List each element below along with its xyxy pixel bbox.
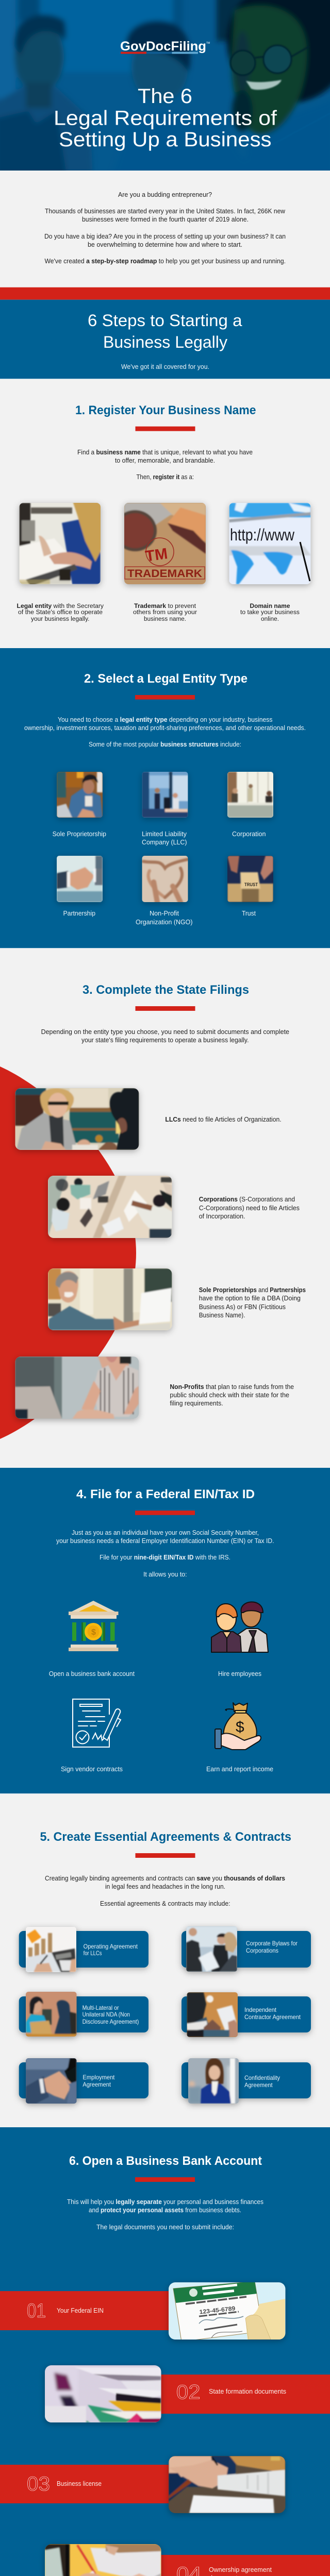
filing text blocks: public should check with their state for the bbox=[170, 1392, 289, 1399]
thumbnail: signing contract on wood table bbox=[186, 1992, 238, 2037]
banner heading: Business Legally bbox=[103, 333, 227, 351]
card label: Disclosure Agreement) bbox=[82, 2018, 139, 2025]
label: Sign vendor contracts bbox=[61, 1766, 123, 1773]
card: NDA bbox=[19, 1992, 148, 2037]
card label: Multi-Lateral or bbox=[82, 2004, 119, 2011]
row 03: business license: 03 bbox=[27, 2473, 50, 2495]
title bbox=[54, 85, 277, 151]
entity type labels: Sole Proprietorship bbox=[53, 831, 106, 838]
card label: Employment bbox=[82, 2074, 115, 2081]
photo: overhead desk with corporate team bbox=[48, 1176, 173, 1238]
card label bbox=[82, 2074, 115, 2088]
banner heading bbox=[88, 311, 242, 351]
captions: Trademark to prevent bbox=[134, 603, 196, 609]
card label: for LLCs bbox=[84, 1950, 102, 1957]
entity type labels: Non-Profit bbox=[150, 910, 179, 917]
section 6: open a business bank account bbox=[0, 2127, 330, 2576]
card: operating agreement bbox=[19, 1927, 148, 1972]
hero banner bbox=[0, 0, 330, 178]
heading 6: 6. Open a Business Bank Account bbox=[69, 2154, 262, 2168]
row 02: state formation documents: State formation documents bbox=[209, 2388, 286, 2395]
section 1 intro: Find a business name that is unique, relevant to what you have bbox=[77, 449, 253, 456]
section 3: complete the state filings bbox=[0, 983, 306, 1439]
filing text blocks: LLCs need to file Articles of Organization. bbox=[165, 1116, 282, 1123]
photo: corporation meeting in bright office bbox=[227, 772, 273, 818]
card label: Corporate Bylaws for bbox=[246, 1940, 298, 1947]
filing text blocks: Business As) or FBN (Fictitious bbox=[199, 1303, 286, 1311]
row 02: state formation documents: 02 bbox=[176, 2381, 201, 2403]
entity type labels: Partnership bbox=[63, 910, 95, 917]
thumbnail: businesswoman in blue blazer bbox=[188, 2058, 239, 2104]
icon: money bag in hand: $ bbox=[236, 1719, 244, 1736]
card label: Confidentiality bbox=[244, 2074, 280, 2081]
section 5 intro: Essential agreements & contracts may include: bbox=[100, 1900, 230, 1907]
filing text blocks: have the option to file a DBA (Doing bbox=[199, 1295, 301, 1302]
title: The 6 bbox=[138, 85, 192, 108]
filing text blocks: Sole Proprietorships and Partnerships bbox=[199, 1286, 306, 1294]
card: corporate bylaws bbox=[182, 1926, 311, 1972]
section 2 intro bbox=[24, 716, 306, 748]
section 1 intro: to offer, memorable, and brandable. bbox=[115, 457, 215, 464]
card label: Contractor Agreement bbox=[244, 2013, 301, 2021]
section 4 intro: File for your nine-digit EIN/Tax ID with the IRS. bbox=[100, 1554, 230, 1561]
photo: trust wooden block: TRUST bbox=[244, 882, 258, 887]
card label bbox=[82, 2004, 139, 2025]
captions: Domain name bbox=[250, 603, 290, 609]
heading 4: 4. File for a Federal EIN/Tax ID bbox=[76, 1487, 255, 1501]
icon: bank building: $ bbox=[91, 1628, 96, 1637]
card label: Unilateral NDA (Non bbox=[82, 2011, 130, 2018]
photo: trademark stamp: TM bbox=[144, 545, 169, 565]
row 03: business license bbox=[0, 2456, 286, 2513]
photo: woman writing in notebook bbox=[19, 500, 103, 586]
photo: EIN letter in hand bbox=[169, 2281, 286, 2342]
captions: others from using your bbox=[133, 609, 197, 616]
entity type labels: Corporation bbox=[232, 831, 266, 838]
photo: trademark stamp bbox=[113, 503, 206, 584]
captions: online. bbox=[261, 616, 279, 622]
label: Open a business bank account bbox=[49, 1670, 135, 1677]
section 2: select a legal entity type bbox=[0, 648, 330, 948]
row 04: ownership agreement: Ownership agreement bbox=[209, 2566, 272, 2573]
photo: partnership handshake bbox=[57, 856, 103, 902]
card: confidentiality agreement bbox=[182, 2058, 311, 2104]
section 3 intro: Depending on the entity type you choose, you need to submit documents and complete bbox=[41, 1028, 289, 1036]
photo: trust wooden block bbox=[227, 856, 273, 902]
section 5 intro bbox=[45, 1875, 285, 1907]
section 5 intro: Creating legally binding agreements and contracts can save you thousands of dollars bbox=[45, 1875, 285, 1882]
photo: stack of papers and folders bbox=[45, 2365, 161, 2422]
icon: signed contract bbox=[73, 1699, 121, 1747]
section 2 intro: ownership, investment sources, taxation and profit-sharing preferences, and other operational needs. bbox=[24, 724, 306, 732]
heading 2: 2. Select a Legal Entity Type bbox=[84, 672, 248, 686]
captions: Legal entity with the Secretary bbox=[16, 603, 104, 609]
row 03: business license: Business license bbox=[57, 2480, 102, 2487]
card label: Agreement bbox=[82, 2081, 111, 2088]
photo: trademark stamp: TRADEMARK bbox=[127, 568, 202, 580]
photo: LLC team in glass office bbox=[142, 772, 188, 818]
section 4 intro bbox=[56, 1529, 274, 1578]
captions bbox=[16, 603, 300, 622]
photo: smiling man with laptop bbox=[48, 1268, 172, 1330]
photo: hands filling in forms bbox=[45, 2544, 161, 2576]
section 6 intro: The legal documents you need to submit include: bbox=[96, 2224, 234, 2231]
intro text: Do you have a big idea? Are you in the process of setting up your own business? It can bbox=[44, 233, 286, 240]
card: employment agreement bbox=[19, 2058, 148, 2104]
intro text: be overwhelming to determine how and where to start. bbox=[88, 241, 242, 248]
entity type labels bbox=[53, 831, 266, 926]
heading 1: 1. Register Your Business Name bbox=[75, 403, 256, 417]
red curved backdrop bbox=[0, 1066, 136, 1439]
intro text: Are you a budding entrepreneur? bbox=[118, 191, 212, 198]
section 4 intro: your business needs a federal Employer Identification Number (EIN) or Tax ID. bbox=[56, 1537, 274, 1545]
section 2 intro: You need to choose a legal entity type depending on your industry, business bbox=[58, 716, 272, 723]
banner subtitle: We've got it all covered for you. bbox=[121, 363, 209, 370]
logo: GovDocFiling: TM bbox=[206, 42, 210, 45]
label: Earn and report income bbox=[206, 1766, 273, 1773]
filing text blocks: Corporations (S-Corporations and bbox=[199, 1196, 295, 1203]
logo: GovDocFiling: GovDocFiling bbox=[120, 39, 206, 54]
thumbnail: two women at a laptop bbox=[26, 1992, 77, 2037]
title: Setting Up a Business bbox=[59, 128, 271, 151]
section 4: federal EIN / tax ID bbox=[0, 1468, 330, 1794]
section 4 intro: Just as you as an individual have your own Social Security Number, bbox=[72, 1529, 259, 1536]
icon: two employees bbox=[211, 1602, 268, 1652]
card: contractor agreement bbox=[182, 1992, 311, 2037]
heading 3: 3. Complete the State Filings bbox=[82, 983, 249, 997]
filing text blocks: filing requirements. bbox=[170, 1400, 223, 1407]
title: Legal Requirements of bbox=[54, 107, 277, 130]
section 2 intro: Some of the most popular business structures include: bbox=[89, 741, 241, 748]
photo: EIN letter in hand: 123-45-6789 bbox=[199, 2306, 236, 2315]
row 01: federal EIN: 01 bbox=[27, 2300, 46, 2322]
section 1: register your business name bbox=[16, 403, 311, 622]
filing text blocks: C-Corporations) need to file Articles bbox=[199, 1205, 300, 1212]
card label bbox=[244, 2006, 301, 2021]
section 3 intro: your state's filing requirements to operate a business legally. bbox=[81, 1037, 249, 1044]
row 02: state formation documents bbox=[45, 2365, 330, 2422]
card label bbox=[244, 2074, 280, 2089]
section 5: agreements and contracts bbox=[19, 1830, 311, 2104]
photo: LLC consultation, blonde woman bbox=[15, 1088, 139, 1150]
intro text: businesses were formed in the fourth quarter of 2019 alone. bbox=[82, 216, 249, 223]
section 4 intro: It allows you to: bbox=[143, 1571, 187, 1578]
entity type labels: Trust bbox=[242, 910, 256, 917]
card label bbox=[84, 1943, 138, 1957]
thumbnail: business people reading document bbox=[186, 1926, 237, 1972]
section 6 intro: This will help you legally separate your personal and business finances bbox=[67, 2198, 263, 2206]
section 1 intro: Then, register it as a: bbox=[136, 473, 194, 481]
label: Hire employees bbox=[218, 1670, 261, 1677]
thumbnail: suited handshake bbox=[26, 2058, 77, 2104]
entity type labels: Organization (NGO) bbox=[136, 919, 193, 926]
photo: signing a license on a desk bbox=[169, 2456, 286, 2513]
row 04: ownership agreement bbox=[45, 2544, 330, 2576]
section 5 intro: in legal fees and headaches in the long run. bbox=[105, 1883, 225, 1890]
photo: domain name browser bar: http://www bbox=[230, 526, 295, 544]
section 1 intro bbox=[77, 449, 253, 481]
intro text bbox=[44, 191, 286, 265]
photo: domain name browser bar bbox=[229, 503, 311, 584]
card label: Independent bbox=[244, 2006, 277, 2013]
section 6 intro bbox=[67, 2198, 263, 2231]
captions: of the State's office to operate bbox=[18, 609, 103, 616]
hero photo: three smiling people in blue tint bbox=[0, 0, 330, 178]
thumbnail: coins and calculator bbox=[26, 1927, 76, 1972]
row 01: federal EIN: Your Federal EIN bbox=[57, 2307, 104, 2314]
card label: Operating Agreement bbox=[84, 1943, 138, 1950]
filing text blocks bbox=[165, 1116, 306, 1407]
section 3 intro bbox=[41, 1028, 289, 1044]
captions: to take your business bbox=[240, 609, 300, 616]
filing text blocks: Non-Profits that plan to raise funds from the bbox=[170, 1383, 294, 1391]
captions: your business legally. bbox=[31, 616, 90, 622]
photo: non-profit hands forming heart bbox=[142, 856, 188, 902]
card label bbox=[246, 1940, 298, 1954]
heading 5: 5. Create Essential Agreements & Contracts bbox=[40, 1830, 291, 1844]
icon: money bag in hand bbox=[215, 1703, 261, 1750]
card label: Corporations bbox=[246, 1947, 278, 1954]
photo: sole proprietorship woman in denim bbox=[57, 772, 103, 818]
banner heading: 6 Steps to Starting a bbox=[88, 311, 242, 330]
row 01: federal EIN bbox=[0, 2281, 286, 2342]
banner: 6 steps bbox=[0, 287, 330, 379]
entity type labels: Limited Liability bbox=[142, 831, 187, 838]
intro text: Thousands of businesses are started every year in the United States. In fact, 266K new bbox=[45, 208, 286, 215]
card label: Agreement bbox=[244, 2081, 273, 2089]
filing text blocks: Business Name). bbox=[199, 1312, 245, 1319]
icon: bank building bbox=[69, 1601, 119, 1651]
filing text blocks: of Incorporation. bbox=[199, 1213, 245, 1220]
section 6 intro: and protect your personal assets from business debts. bbox=[89, 2207, 241, 2214]
captions: business name. bbox=[144, 616, 186, 622]
entity type labels: Company (LLC) bbox=[142, 839, 187, 846]
photo: woman in striped blouse at laptop bbox=[15, 1357, 139, 1419]
intro text: We've created a step-by-step roadmap to help you get your business up and running. bbox=[44, 258, 286, 265]
